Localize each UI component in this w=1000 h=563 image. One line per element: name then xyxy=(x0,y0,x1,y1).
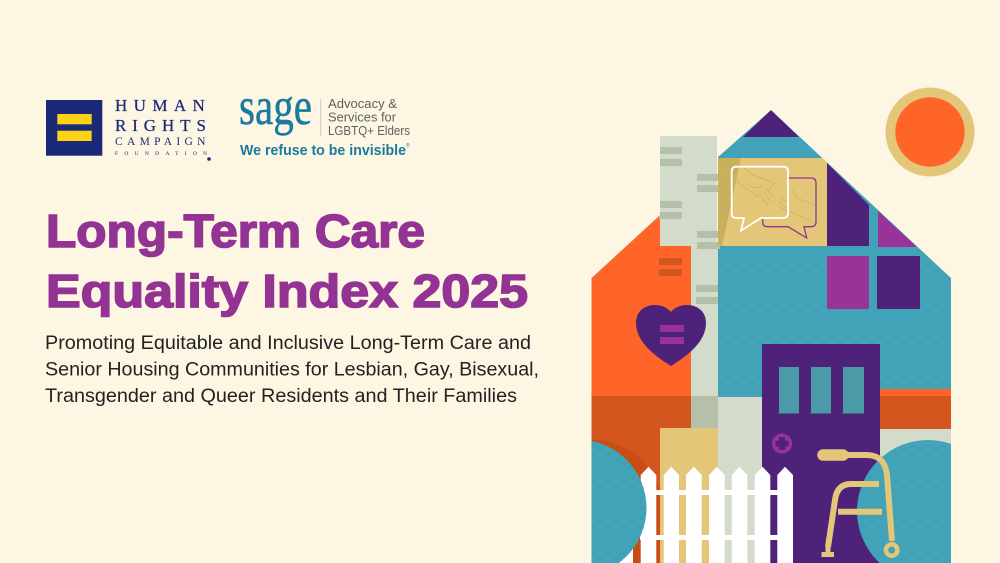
left wing: orange wall xyxy=(592,215,691,396)
logo: Human Rights Campaign Foundation: RIGHTS xyxy=(115,116,212,135)
logo: Human Rights Campaign Foundation xyxy=(46,96,213,161)
title xyxy=(46,205,528,317)
logo: SAGE: sage xyxy=(239,78,312,136)
roof magenta triangle xyxy=(878,211,917,247)
right band: pale xyxy=(880,429,951,457)
logo: Human Rights Campaign Foundation: FOUNDATION xyxy=(115,151,213,157)
picket fence xyxy=(618,467,793,563)
left shrub shadow xyxy=(592,440,660,563)
roof purple panel xyxy=(827,163,869,246)
logo: Human Rights Campaign Foundation: HUMAN xyxy=(115,96,211,115)
subtitle text block: Transgender and Queer Residents and Their Families xyxy=(45,386,517,407)
logo: SAGE xyxy=(239,78,410,159)
title: Long-Term Care xyxy=(46,205,425,257)
orange wall bricks xyxy=(659,258,682,276)
window pane magenta xyxy=(827,256,869,309)
subtitle text block: Promoting Equitable and Inclusive Long-Term Care and xyxy=(45,333,531,354)
logo: SAGE: ® xyxy=(406,142,410,149)
right band: orange xyxy=(880,389,951,396)
right shrub xyxy=(857,440,951,563)
chimney tower xyxy=(660,136,718,397)
icon: walker xyxy=(822,455,897,557)
icon: sun xyxy=(886,88,974,176)
door knob xyxy=(772,434,792,454)
door windows xyxy=(779,367,799,414)
chimney bricks xyxy=(659,147,720,304)
subtitle text block: Senior Housing Communities for Lesbian, Gay, Bisexual, xyxy=(45,360,539,380)
title: Equality Index 2025 xyxy=(46,265,528,317)
yellow panel xyxy=(660,428,718,563)
icon: purple speech bubble xyxy=(763,178,816,238)
right band: dark orange xyxy=(880,396,951,429)
logo: Human Rights Campaign Foundation: CAMPAIGN xyxy=(115,136,210,148)
icon: white speech bubble xyxy=(732,167,788,231)
icon: heart with equal sign xyxy=(636,305,706,366)
window pane purple xyxy=(877,256,920,309)
door xyxy=(762,344,880,563)
logo: SAGE: Services for xyxy=(328,110,397,125)
chimney overlap shade xyxy=(691,396,718,428)
left wing: dark orange band xyxy=(592,396,691,490)
house wall: teal patterned body xyxy=(718,110,951,397)
roof peak triangle xyxy=(743,110,799,137)
icon: hands xyxy=(718,158,815,223)
yellow panel with speech bubbles xyxy=(718,158,827,246)
pale panel xyxy=(718,397,762,563)
illustration: house xyxy=(592,110,951,563)
logo: SAGE: We refuse to be invisible xyxy=(240,142,406,159)
logo: SAGE: LGBTQ+ Elders xyxy=(328,123,410,138)
logo: SAGE: Advocacy & xyxy=(328,96,397,111)
left shrub xyxy=(592,440,646,563)
subtitle text block xyxy=(45,333,539,407)
